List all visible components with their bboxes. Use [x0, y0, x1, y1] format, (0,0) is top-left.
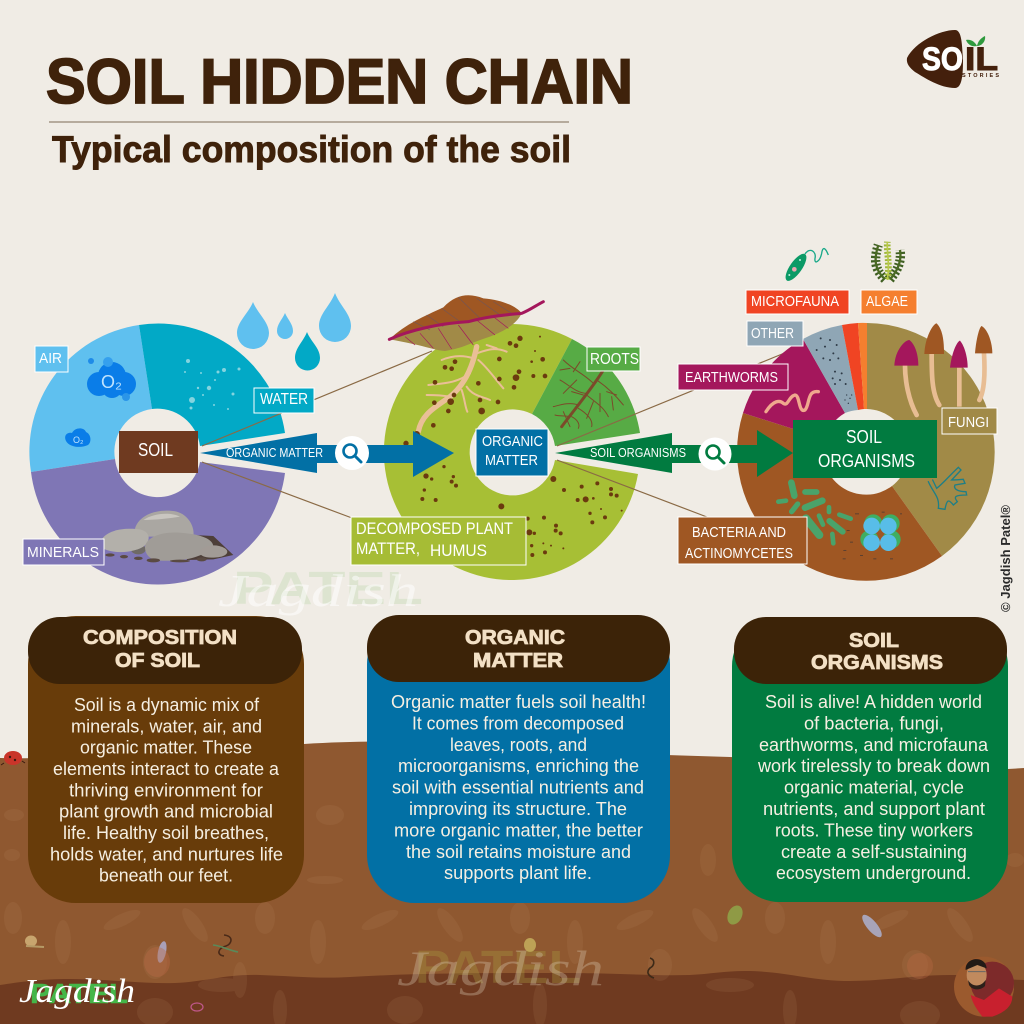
label: other: OTHER [751, 326, 794, 342]
panel: composition of soil [28, 616, 304, 903]
logo: Soil Stories [907, 30, 999, 88]
panel header: organic matter: MATTER [473, 650, 564, 672]
logo: Soil Stories: SO [922, 41, 963, 77]
panel text: soil organisms: ecosystem underground. [776, 863, 971, 883]
chart: soil composition donut [29, 324, 285, 585]
label: microfauna [746, 290, 849, 314]
panel text: soil organisms [757, 692, 990, 883]
label: minerals: MINERALS [27, 544, 99, 561]
label: earthworms: EARTHWORMS [685, 370, 778, 386]
watermark: Patel Jagdish faint upper [218, 562, 423, 616]
icon: mushrooms [894, 323, 992, 415]
label: roots [587, 347, 640, 371]
label: water [254, 388, 314, 413]
panel text: soil organisms: of bacteria, fungi, [804, 713, 944, 733]
panel text: organic matter: microorganisms, enriching the [398, 756, 639, 776]
label: microfauna: MICROFAUNA [751, 294, 839, 310]
label: organic matter [476, 429, 548, 476]
icon: fungal hypha [928, 467, 967, 509]
icon: rocks [99, 511, 233, 562]
label: soil organisms: SOIL [846, 427, 882, 447]
segment: earthworms [743, 339, 845, 439]
label: minerals [23, 539, 104, 565]
label: decomposed plant matter, humus: HUMUS [430, 542, 487, 560]
segment: algae [858, 323, 867, 409]
panel: organic matter [367, 615, 670, 903]
arrow: organic matter to soil organisms: SOIL ORGANISMS [590, 446, 686, 460]
panel text: composition of soil: life. Healthy soil breathes, [63, 823, 269, 843]
segment: minerals [31, 459, 285, 585]
segment: roots [532, 339, 640, 446]
label: algae: ALGAE [866, 294, 908, 310]
segment: fungi [867, 323, 995, 556]
icon: decaying roots [418, 345, 507, 432]
watermark: Patel Jagdish faint upper: PATEL [233, 562, 423, 614]
panel header: organic matter [367, 615, 670, 682]
subtitle: Typical composition of the soil [52, 129, 571, 170]
connector lines from soil [202, 351, 432, 518]
panel text: organic matter: leaves, roots, and [450, 735, 587, 755]
watermark: Patel Jagdish faint lower: Jagdish [397, 940, 604, 996]
icon: roots [553, 360, 623, 428]
label: roots: ROOTS [590, 351, 639, 368]
panel text: soil organisms: nutrients, and support plant [763, 799, 985, 819]
panel text: organic matter: improving its structure. The [409, 799, 627, 819]
panel text: soil organisms: work tirelessly to break down [757, 756, 990, 776]
panel header: soil organisms: ORGANISMS [811, 652, 943, 674]
panel: soil organisms [732, 617, 1008, 902]
watermark: Patel Jagdish faint lower: PATEL [415, 941, 581, 993]
label: soil [119, 431, 198, 473]
panel text: composition of soil: plant growth and microbial [59, 802, 273, 822]
label: bacteria and actinomycetes: BACTERIA AND [692, 525, 786, 541]
segment: bacteria and actinomycetes [737, 413, 942, 581]
label: soil organisms [793, 420, 937, 478]
panel text: composition of soil: holds water, and nurtures life [50, 844, 283, 864]
logo: Soil Stories: STORIES [962, 73, 999, 79]
panel header: soil organisms: SOIL [849, 630, 899, 652]
panel header: composition of soil [28, 617, 302, 684]
panel text: soil organisms: roots. These tiny workers [775, 820, 973, 840]
icon: oxygen cloud small: O₂ [73, 435, 84, 445]
chart: organic matter donut [384, 324, 640, 580]
icon: oxygen cloud large [87, 357, 136, 401]
title: SOIL HIDDEN CHAIN [46, 47, 633, 117]
icon: ladybug [1, 751, 25, 765]
panel text: organic matter: supports plant life. [444, 863, 592, 883]
panel header: composition of soil: OF SOIL [115, 650, 200, 672]
logo: Patel Jagdish signature: Jagdish [19, 973, 135, 1010]
faint soil creature pattern [4, 805, 1024, 1024]
panel header: composition of soil: COMPOSITION [83, 627, 237, 649]
panel text: composition of soil: beneath our feet. [99, 866, 233, 886]
panel text: organic matter: more organic matter, the better [394, 820, 643, 840]
panel text: composition of soil: thriving environment for [69, 780, 263, 800]
panel text: composition of soil: minerals, water, air, and [71, 716, 262, 736]
panel text: organic matter [391, 692, 646, 883]
label: soil: SOIL [138, 440, 173, 460]
soil ground layers [0, 742, 1024, 1024]
label: water: WATER [260, 391, 308, 408]
label: fungi [942, 408, 997, 434]
panel text: soil organisms: organic material, cycle [784, 778, 964, 798]
arrow: soil to organic matter [200, 431, 454, 477]
panel text: organic matter: the soil retains moisture and [406, 842, 631, 862]
icon: actinomycete cells [843, 512, 902, 559]
icon: water droplets [237, 293, 351, 370]
logo: Soil Stories: IL [965, 41, 998, 77]
panel header: organic matter: ORGANIC [465, 627, 565, 649]
segment: microfauna [842, 323, 864, 410]
arrow: organic matter to soil organisms [555, 430, 793, 477]
segment: water [139, 324, 285, 446]
segment: air [29, 325, 152, 472]
icon: specks in other segment [816, 337, 852, 404]
panel text: composition of soil [50, 695, 283, 886]
panel text: composition of soil: Soil is a dynamic mix of [74, 695, 260, 715]
icon: water bubbles [184, 359, 240, 410]
label: decomposed plant matter, humus: MATTER, [356, 540, 420, 558]
label: organic matter: ORGANIC [482, 433, 543, 450]
watermark: Patel Jagdish faint upper: Jagdish [218, 565, 418, 616]
panel header: soil organisms [734, 617, 1007, 684]
chart: soil organisms donut [737, 323, 995, 581]
label: soil organisms: ORGANISMS [818, 451, 915, 471]
label: bacteria and actinomycetes [678, 517, 807, 564]
label: bacteria and actinomycetes: ACTINOMYCETES [685, 546, 793, 562]
label: air: AIR [39, 350, 62, 367]
title rule [49, 122, 569, 123]
panel text: soil organisms: Soil is alive! A hidden world [765, 692, 982, 712]
label: air [35, 346, 68, 372]
panel text: soil organisms: create a self-sustaining [781, 842, 967, 862]
label: decomposed plant matter, humus: DECOMPOSED PLANT [356, 520, 513, 538]
icon: earthworm [766, 392, 818, 412]
icon: microfauna paramecium [782, 249, 828, 284]
label: fungi: FUNGI [948, 415, 989, 431]
icon: leaf [389, 295, 543, 351]
logo: Patel Jagdish signature: PATEL [30, 978, 128, 1009]
humus particles [403, 336, 623, 557]
copyright credit: © Jagdish Patel® [998, 505, 1013, 612]
icon: algae [876, 242, 900, 280]
arrow: soil to organic matter: ORGANIC MATTER [226, 446, 323, 460]
label: earthworms [678, 364, 788, 390]
label: organic matter: MATTER [485, 452, 538, 469]
icon: bacteria rods [778, 483, 851, 543]
label: algae [861, 290, 917, 314]
panel text: composition of soil: elements interact to create a [53, 759, 280, 779]
connector lines from organic matter [557, 352, 787, 517]
panel text: soil organisms: earthworms, and microfauna [759, 735, 989, 755]
panel text: composition of soil: organic matter. These [80, 738, 252, 758]
panel text: organic matter: It comes from decomposed [412, 713, 624, 733]
portrait badge [954, 957, 1014, 1017]
panel text: organic matter: Organic matter fuels soil health! [391, 692, 646, 712]
icon: oxygen cloud large: O₂ [101, 372, 122, 392]
small soil creatures [25, 903, 933, 1011]
panel text: organic matter: soil with essential nutrients and [392, 778, 644, 798]
label: decomposed plant matter, humus [351, 517, 526, 565]
label: other [747, 321, 803, 346]
icon: oxygen cloud small [65, 428, 90, 447]
segment: decomposed plant matter [384, 324, 638, 580]
segment: other [803, 325, 858, 413]
